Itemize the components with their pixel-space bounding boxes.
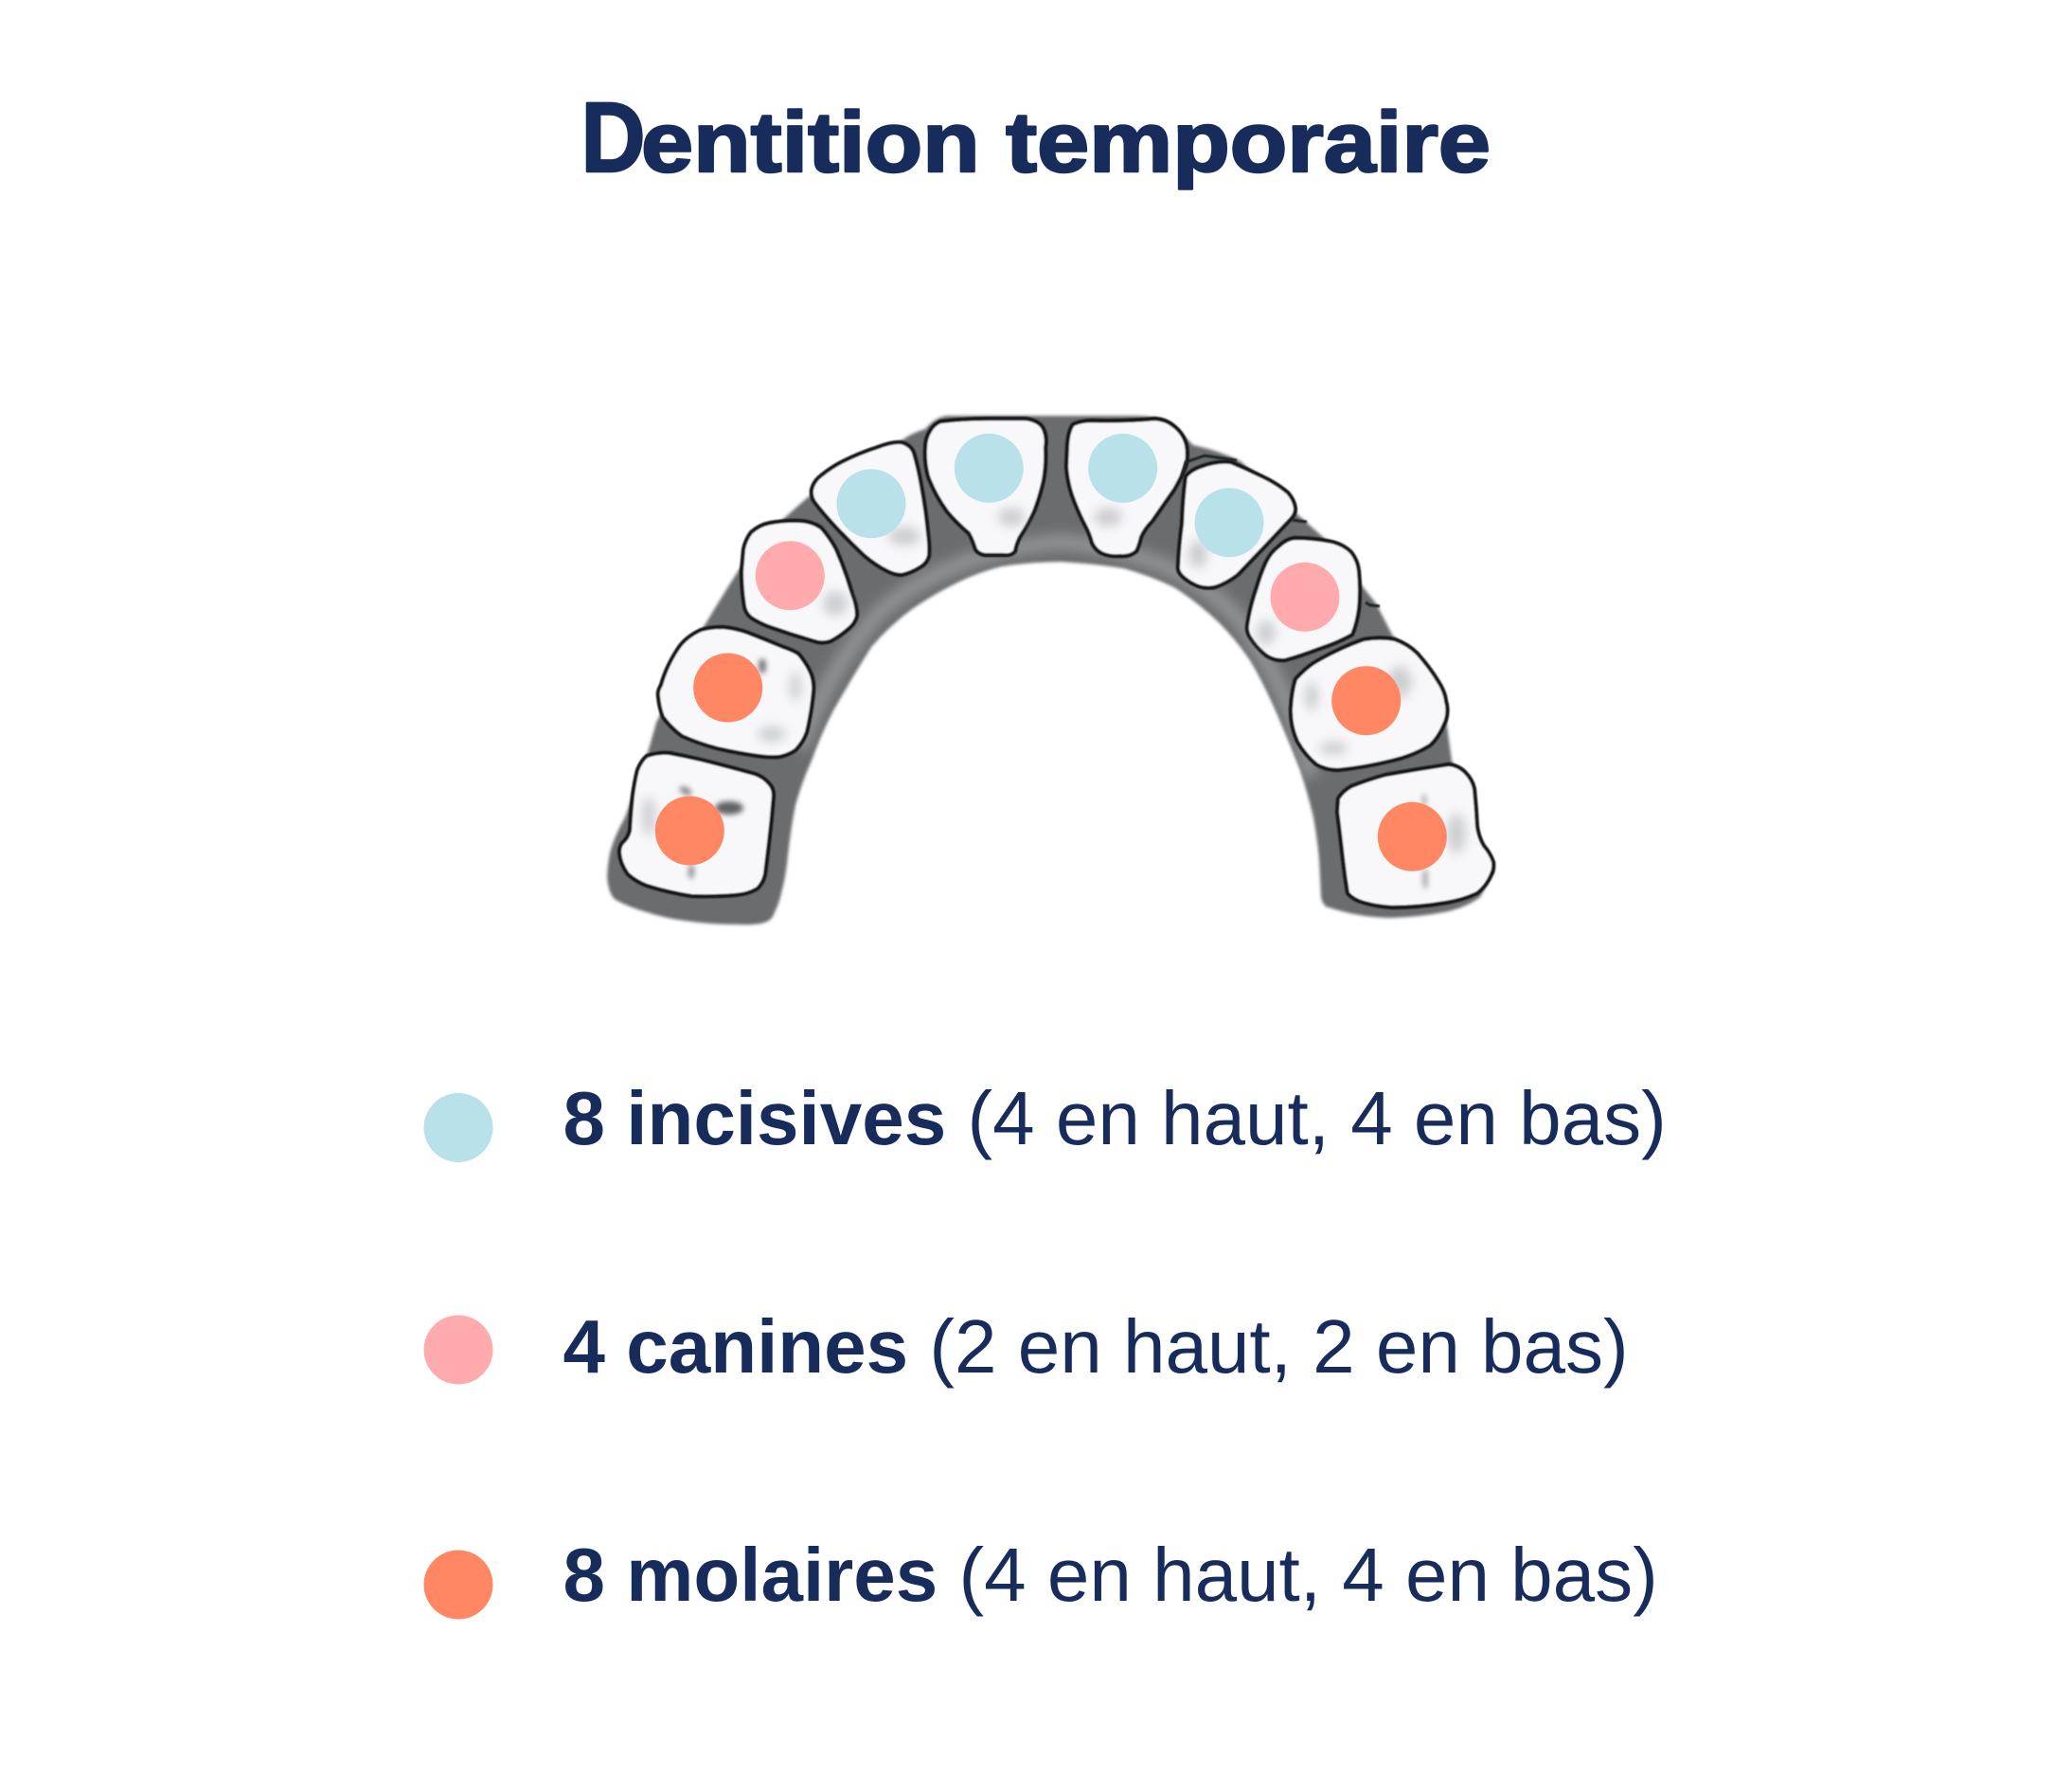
gum arch bbox=[607, 416, 1494, 924]
tooth: molar upper right bbox=[1291, 638, 1447, 770]
dot: canine bbox=[1271, 563, 1339, 632]
dot: molar bbox=[1378, 802, 1447, 871]
dot: molar bbox=[693, 654, 762, 722]
dot: molar bbox=[655, 796, 724, 866]
tooth: canine left bbox=[741, 521, 857, 642]
dental arch illustration bbox=[607, 416, 1494, 924]
tooth: canine right bbox=[1247, 538, 1360, 660]
dot: canine bbox=[756, 541, 825, 610]
dot: incisor bbox=[955, 434, 1024, 503]
legend dot: incisives bbox=[424, 1093, 492, 1162]
tooth: molar upper left bbox=[658, 627, 813, 757]
title: D bbox=[581, 82, 646, 193]
tooth: lateral incisor left bbox=[812, 442, 929, 575]
dot: incisor bbox=[1195, 488, 1263, 557]
legend row: molaires bbox=[424, 1533, 1658, 1620]
legend dot: molaires bbox=[424, 1550, 492, 1620]
dot: incisor bbox=[837, 469, 905, 538]
title: entition temporaire bbox=[641, 96, 1491, 190]
tooth: molar lower left bbox=[619, 753, 774, 896]
legend row: incisives bbox=[424, 1076, 1667, 1162]
legend text: canines: 4 canines (2 en haut, 2 en bas) bbox=[563, 1304, 1629, 1389]
legend row: canines bbox=[424, 1304, 1629, 1389]
dot: molar bbox=[1331, 666, 1401, 735]
tooth marks bbox=[678, 658, 1428, 889]
gum highlight bbox=[800, 426, 1312, 777]
tooth: central incisor left bbox=[925, 419, 1046, 555]
tooth: molar lower right bbox=[1337, 764, 1493, 907]
legend dot: canines bbox=[424, 1315, 492, 1385]
tooth: central incisor right bbox=[1066, 419, 1188, 556]
tooth: lateral incisor right bbox=[1178, 462, 1295, 588]
dot: incisor bbox=[1088, 434, 1157, 503]
legend text: incisives: 8 incisives (4 en haut, 4 en bas) bbox=[563, 1076, 1667, 1160]
legend text: molaires: 8 molaires (4 en haut, 4 en bas) bbox=[563, 1533, 1658, 1617]
jagged outline marks bbox=[1182, 456, 1380, 606]
tooth shading bbox=[642, 508, 1466, 853]
